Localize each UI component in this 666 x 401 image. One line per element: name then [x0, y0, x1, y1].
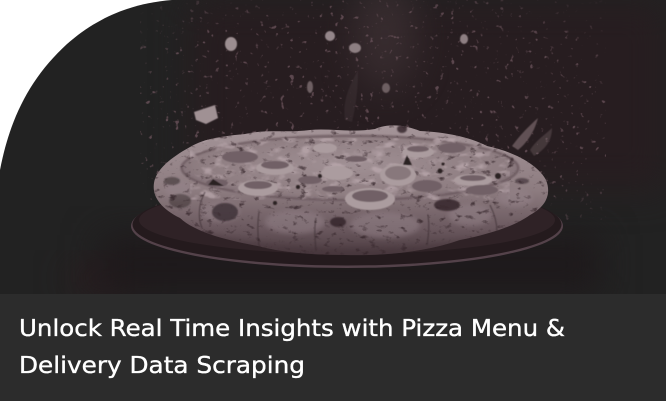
pizza base and crust — [150, 124, 550, 260]
tomato slices and toppings — [206, 143, 501, 210]
scattered crumb speckle — [140, 0, 606, 220]
reddish smoke glow — [111, 0, 574, 282]
background — [0, 0, 666, 294]
title: Unlock Real Time Insights with Pizza Menu & — [19, 316, 565, 342]
title — [19, 316, 565, 379]
cheese surface — [180, 134, 520, 189]
hero image: pizza on dark background — [0, 0, 666, 294]
plate — [131, 205, 563, 268]
flame streaks at right — [344, 70, 552, 156]
flying crust pieces — [194, 31, 468, 124]
dark blotch noise — [150, 124, 550, 256]
crust seams and char marks — [164, 125, 529, 227]
crust puffs — [202, 190, 528, 239]
caption band — [0, 294, 666, 401]
title: Delivery Data Scraping — [19, 353, 305, 379]
inner crust shadow — [182, 136, 518, 200]
bottom shade of crust — [217, 236, 240, 242]
light cheese noise — [190, 138, 510, 200]
